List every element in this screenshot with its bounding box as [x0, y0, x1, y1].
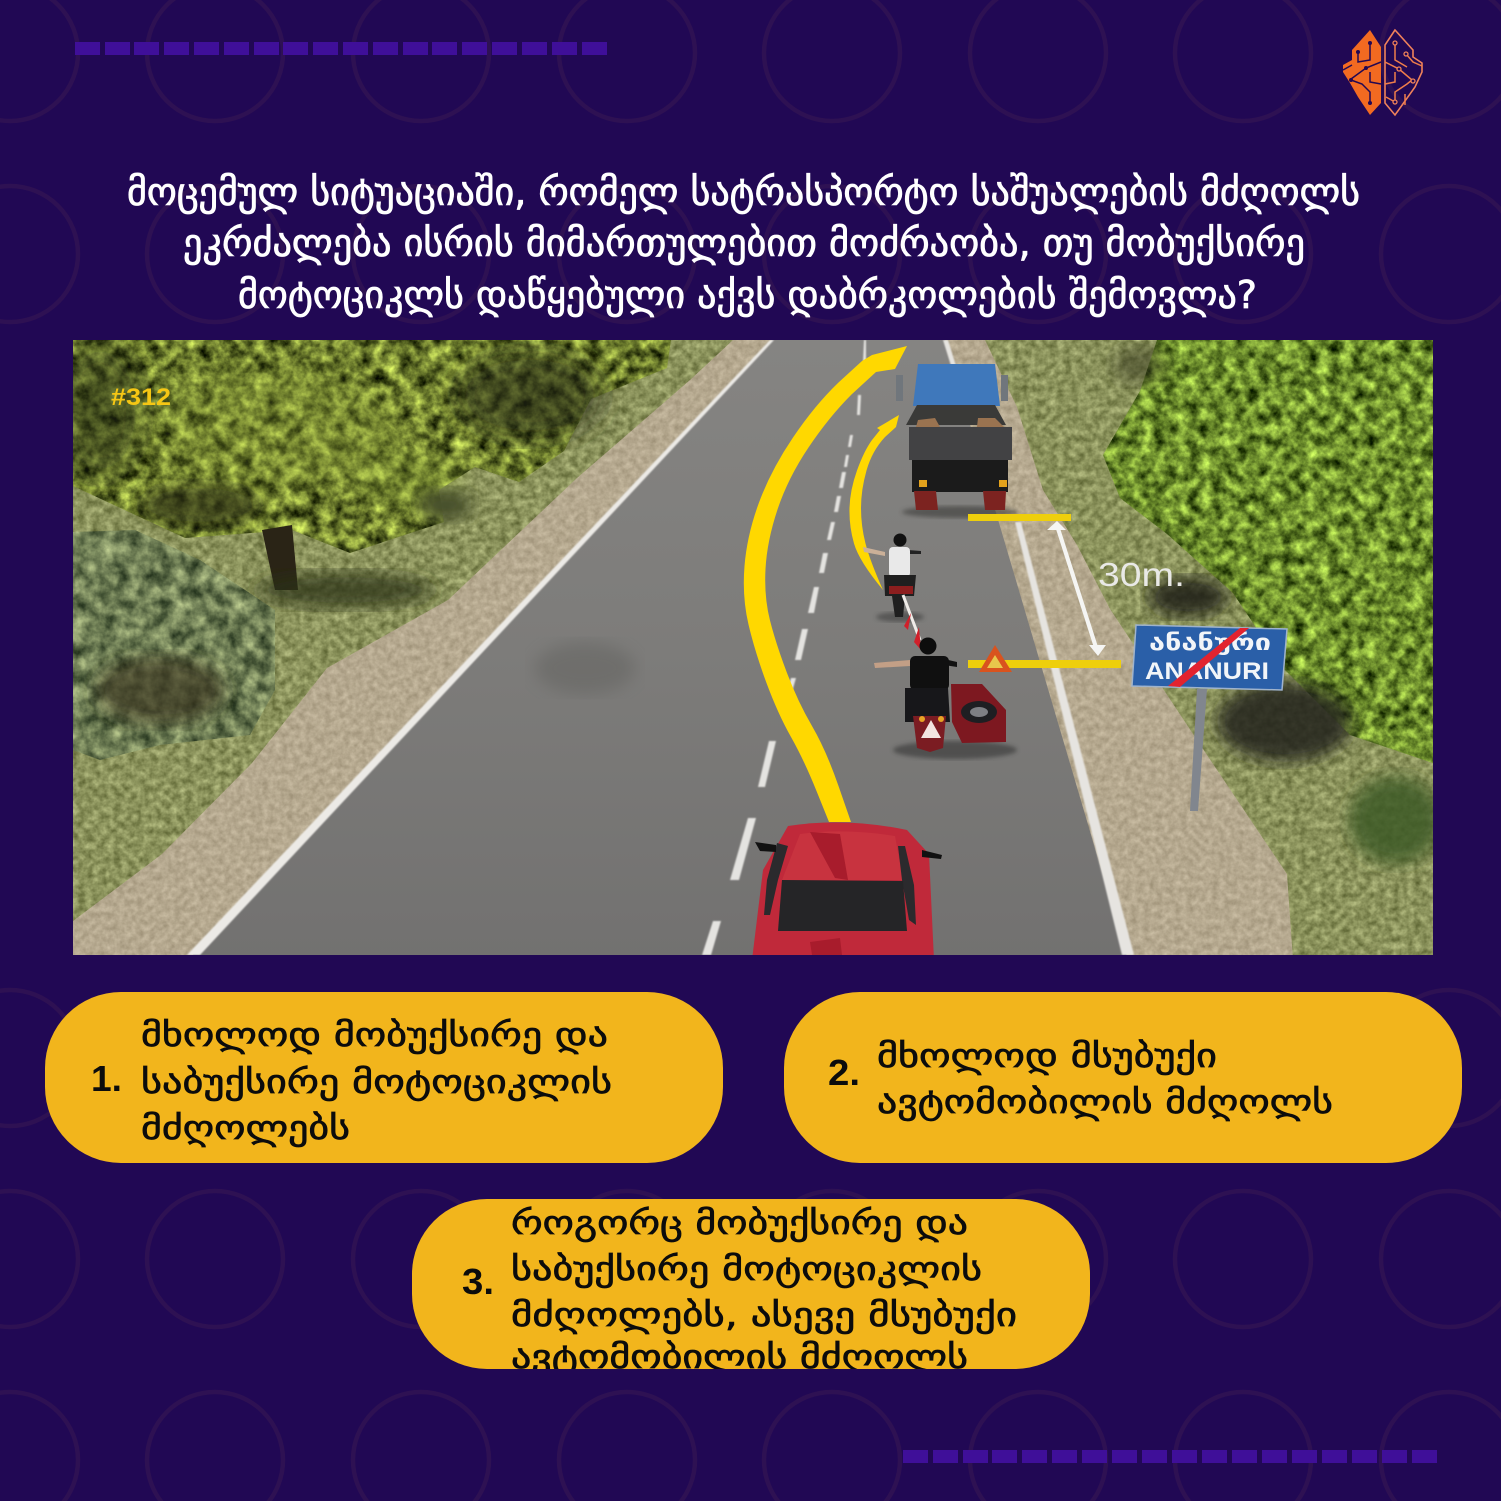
answer option 1: მძღოლებს [141, 1108, 350, 1147]
answer option 1 [45, 992, 723, 1163]
answer option 1: 1. [91, 1058, 122, 1099]
title: question text: ეკრძალება ისრის მიმართულებით მოძრაობა, თუ მობუქსირე [183, 221, 1305, 265]
tan shoulder left [73, 340, 775, 960]
arrow: 30 metre distance [1047, 521, 1106, 656]
title: question text [127, 170, 1360, 317]
answer option 3: მძღოლებს, ასევე მსუბუქი [511, 1295, 1017, 1334]
title: question text: მოცემულ სიტუაციაში, რომელ სატრასპორტო საშუალების მძღოლს [127, 170, 1360, 214]
asphalt road [188, 340, 1128, 960]
question number label: #312 [111, 384, 171, 411]
label: 30m.: 30m. [1098, 556, 1185, 593]
grass right [985, 340, 1433, 960]
dashed decorative bar: bottom [903, 1450, 1437, 1463]
answer option 2: ავტომობილის მძღოლს [877, 1082, 1333, 1121]
road sign: Ananuri [1132, 625, 1287, 811]
road sign: Ananuri: ანანური [1149, 631, 1271, 656]
answer option 3 [412, 1199, 1090, 1376]
answer option 3: ავტომობილის მძღოლს [511, 1337, 968, 1376]
icon: brain logo [1343, 30, 1422, 115]
red car [752, 822, 942, 960]
answer option 2 [784, 992, 1462, 1163]
answer option 2: მხოლოდ მსუბუქი [877, 1036, 1217, 1075]
truck [896, 364, 1018, 518]
road edge lines [187, 340, 774, 955]
road sign: Ananuri: ANANURI [1145, 658, 1269, 685]
answer option 3: 3. [462, 1261, 494, 1302]
shrubs: lower left [73, 530, 275, 760]
warning triangle [979, 645, 1012, 672]
answer option 2: 2. [828, 1052, 860, 1093]
tow bar with red flags [903, 595, 921, 650]
panel: road scene photo [55, 340, 1441, 960]
answer option 1: საბუქსირე მოტოციკლის [141, 1062, 612, 1101]
dry grass base [73, 340, 1293, 955]
bushes right [1103, 340, 1433, 763]
dashed decorative bar: top [75, 42, 607, 55]
motorcycle with sidecar [874, 638, 1017, 759]
trees: left [73, 340, 671, 553]
dashed centre line [702, 340, 866, 955]
tan shoulder right [945, 340, 1293, 960]
answer option 3: საბუქსირე მოტოციკლის [511, 1249, 982, 1288]
answer option 1: მხოლოდ მობუქსირე და [141, 1015, 608, 1054]
distance lines [968, 514, 1071, 521]
title: question text: მოტოციკლს დაწყებული აქვს დაბრკოლების შემოვლა? [238, 273, 1257, 317]
arrow: towing motorcycle path [849, 415, 899, 590]
answer option 3: როგორც მობუქსირე და [511, 1203, 968, 1242]
arrow: overtaking path of car [744, 346, 907, 822]
motorcycle with white-shirt rider [863, 534, 924, 622]
